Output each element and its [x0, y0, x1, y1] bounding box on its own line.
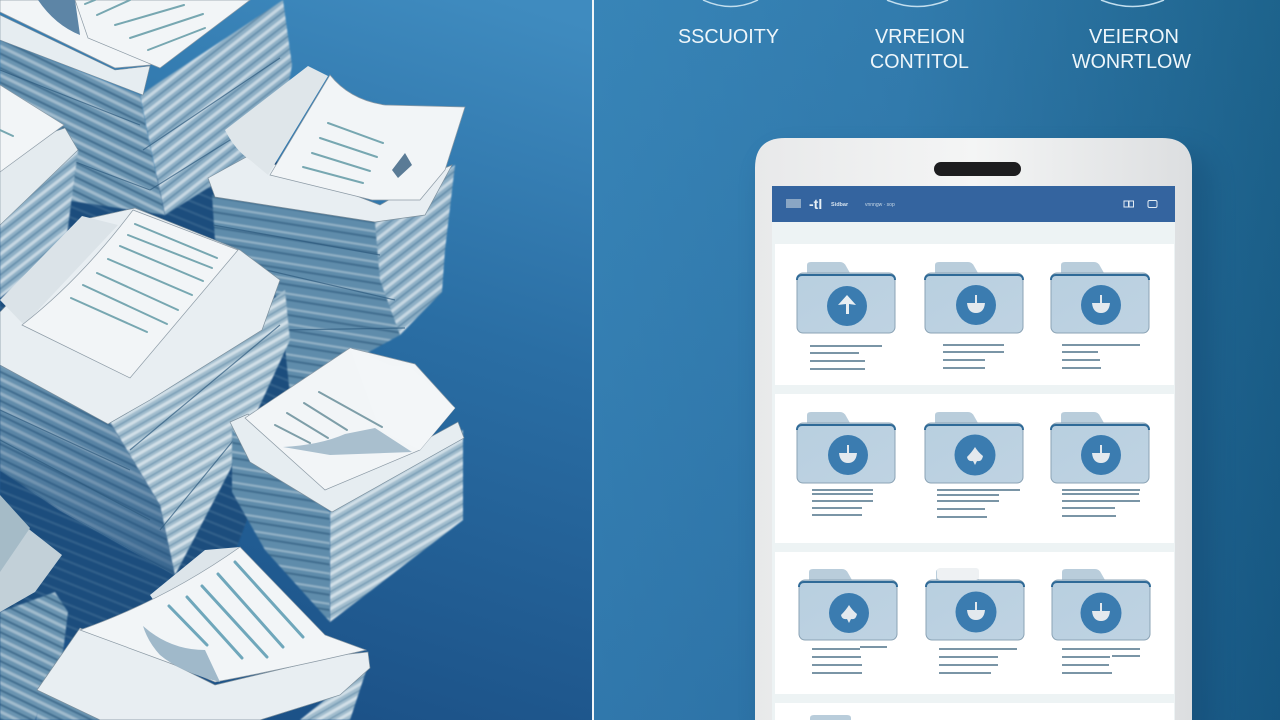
- folder: row 2 column 2: [925, 412, 1023, 517]
- folder: row 1 column 3: [1051, 262, 1149, 368]
- background: right panel: [594, 0, 1280, 720]
- label: version workflow: VEIERON: [1089, 25, 1179, 48]
- shadowed gap behind the piles: [0, 160, 292, 640]
- folder: row 1 column 2: [925, 262, 1023, 368]
- feature icon arc: security: [703, 0, 758, 6]
- app header bar: [772, 186, 1175, 222]
- paper pile: top left: [0, 0, 292, 215]
- folder: row 3 column 3: [1052, 569, 1150, 673]
- paper pile: right middle: [208, 66, 465, 395]
- app header bar: vnnngw · sop: [865, 202, 895, 208]
- feature icon arc: version control: [887, 0, 948, 6]
- label: version workflow: [1072, 25, 1192, 73]
- phone shadow: [762, 150, 1212, 720]
- folder: row 2 column 3: [1051, 412, 1149, 516]
- label: version workflow: WONRTLOW: [1072, 50, 1192, 73]
- paper pile: bottom left: [0, 495, 68, 720]
- paper pile: bottom centre: [36, 547, 370, 720]
- divider line: [592, 0, 594, 720]
- file row 3: [775, 552, 1174, 694]
- label: version control: VRREION: [875, 25, 965, 48]
- label: version control: CONTITOL: [870, 50, 969, 73]
- phone body: [755, 138, 1192, 720]
- file row 2: [775, 394, 1174, 543]
- folder: row 3 column 1: [799, 569, 897, 673]
- feature icon arc: version workflow: [1101, 0, 1164, 6]
- paper pile: right lower: [230, 348, 464, 622]
- label: version control: [870, 25, 969, 73]
- app header bar: Sidbar: [831, 202, 849, 208]
- app header bar: -tl: [809, 196, 822, 212]
- folder: row 3 column 2: [926, 568, 1024, 673]
- phone mockup: [755, 138, 1192, 720]
- file row 4 (cropped): [775, 703, 1174, 720]
- label: security: SSCUOITY: [678, 25, 779, 48]
- panel: paper piles: [0, 0, 465, 720]
- background: left panel: [0, 0, 592, 720]
- phone notch: [934, 162, 1021, 176]
- file row 1: [775, 244, 1174, 385]
- paper pile: left edge: [0, 85, 78, 298]
- folder: row 1 column 1: [797, 262, 895, 369]
- paper pile: centre left: [0, 208, 290, 575]
- folder: row 2 column 1: [797, 412, 895, 515]
- screen background: [772, 222, 1175, 720]
